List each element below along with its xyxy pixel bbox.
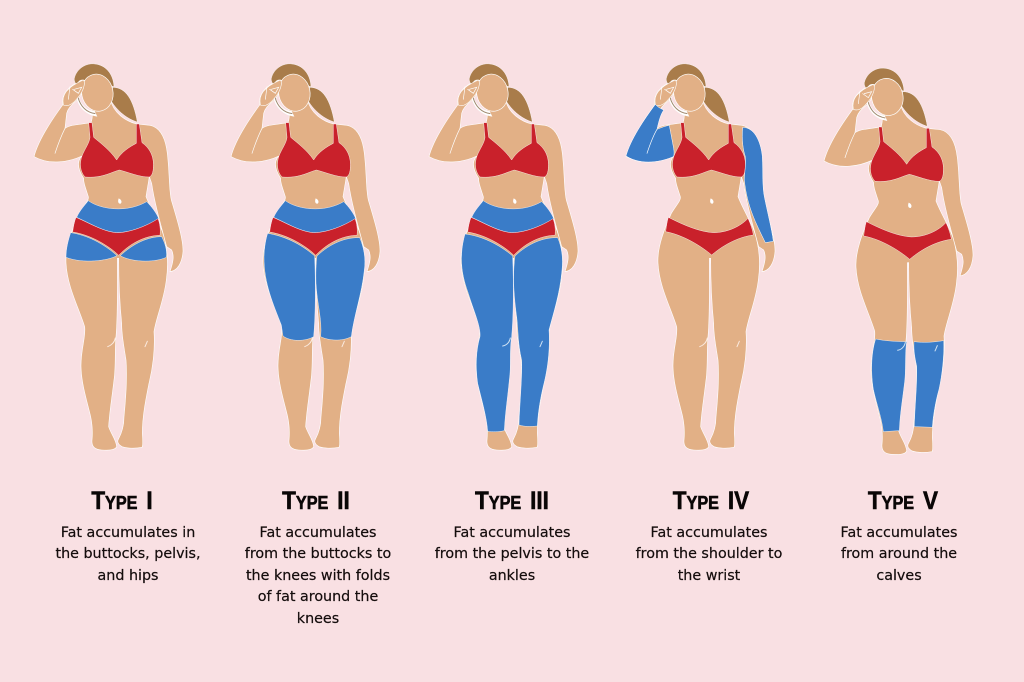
bra (672, 123, 745, 177)
figure: Type I (34, 64, 183, 450)
bra (870, 127, 943, 181)
figure: Type III (429, 64, 578, 450)
text: Type IV description: from the shoulder to (636, 546, 782, 562)
knee marks (898, 342, 937, 351)
text: Type I description: Fat accumulates in (61, 525, 195, 541)
fat area: calves (872, 339, 944, 432)
text: Type V description (841, 525, 957, 584)
fat area: pelvis to ankles (461, 201, 562, 432)
bra (277, 123, 350, 177)
heading: Type III: Type III (475, 487, 549, 515)
text: Type II description (244, 525, 391, 627)
heading: Type II: Type II (282, 487, 350, 515)
text: Type III description: Fat accumulates (454, 525, 570, 541)
briefs (666, 217, 753, 255)
text: Type II description: of fat around the (258, 589, 378, 605)
text: Type IV description: the wrist (678, 568, 740, 584)
heading: Type V: Type V (868, 487, 938, 515)
figure: Type II (231, 64, 380, 450)
text: Type IV description (636, 525, 782, 584)
text: Type I description: and hips (98, 568, 158, 584)
text: Type V description: from around the (841, 546, 957, 562)
text: Type II description: from the buttocks to (245, 546, 391, 562)
text: Type IV description: Fat accumulates (651, 525, 767, 541)
text: Type V description: calves (876, 568, 922, 584)
bra (475, 123, 548, 177)
knee marks (503, 338, 542, 347)
fat area: pelvis, hips and buttocks (66, 201, 167, 261)
briefs (864, 222, 951, 259)
figure: Type V (824, 68, 973, 454)
text: Type III description: ankles (489, 568, 535, 584)
text: Type II description: Fat accumulates (260, 525, 376, 541)
bra (80, 123, 153, 177)
figure: Type IV (626, 64, 775, 450)
heading: Type I: Type I (91, 487, 153, 515)
text: Type I description (55, 525, 201, 584)
fat area: shoulder to wrist (626, 104, 773, 243)
text: Type II description: knees (297, 611, 339, 627)
text: Type V description: Fat accumulates (841, 525, 957, 541)
fat area: buttocks to knees (264, 201, 365, 340)
text: Type III description (434, 525, 589, 584)
text: Type I description: the buttocks, pelvis, (55, 546, 201, 562)
text: Type III description: from the pelvis to the (435, 546, 589, 562)
text: Type II description: the knees with folds (246, 568, 390, 584)
heading: Type IV: Type IV (673, 487, 749, 515)
